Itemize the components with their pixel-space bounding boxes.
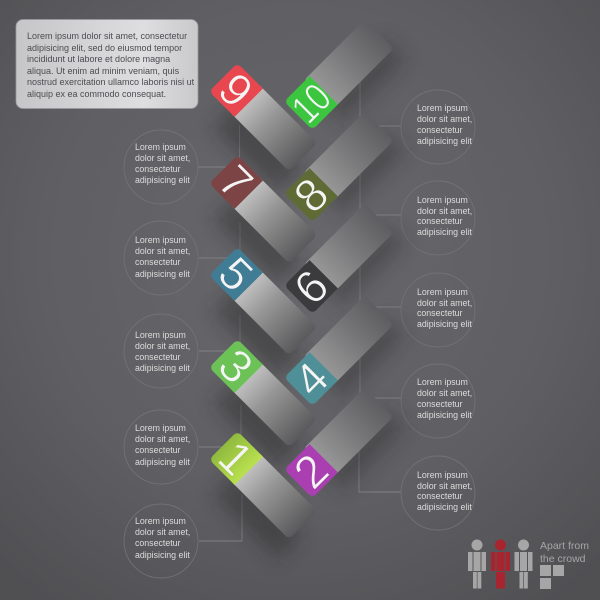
left callout 2: Lorem ipsum bbox=[135, 235, 186, 245]
ribbon step 1: 1 bbox=[209, 431, 263, 485]
intro text box bbox=[16, 20, 198, 108]
right callout 4: dolor sit amet, bbox=[417, 388, 472, 398]
ribbon step 7 bbox=[194, 151, 327, 284]
right callout 2: dolor sit amet, bbox=[417, 206, 472, 216]
left callout 3 bbox=[124, 314, 198, 388]
right callout 2: adipisicing elit bbox=[417, 227, 472, 237]
right callout 5: dolor sit amet, bbox=[417, 481, 472, 491]
right callout 1 bbox=[401, 90, 475, 164]
right callout 1: adipisicing elit bbox=[417, 136, 472, 146]
right callout 3: adipisicing elit bbox=[417, 319, 472, 329]
intro text box: nostrud exercitation ullamco laboris nisi ut bbox=[27, 77, 195, 87]
ribbon step 3: 3 bbox=[209, 339, 263, 393]
right callout 1: dolor sit amet, bbox=[417, 114, 472, 124]
right callout 5: Lorem ipsum bbox=[417, 470, 468, 480]
left callout 2: consectetur bbox=[135, 257, 181, 267]
left callout 4: adipisicing elit bbox=[135, 457, 190, 467]
left callout 2: adipisicing elit bbox=[135, 269, 190, 279]
icon: three people, one red bbox=[468, 540, 532, 588]
ribbon step 2: 2 bbox=[284, 444, 338, 498]
right callout 4: adipisicing elit bbox=[417, 410, 472, 420]
ribbon step 9: 9 bbox=[209, 63, 263, 117]
ribbon step 7: 7 bbox=[209, 155, 263, 209]
ribbon step 4 bbox=[280, 291, 406, 417]
left callout 5: adipisicing elit bbox=[135, 550, 190, 560]
right callout 3 bbox=[401, 273, 475, 347]
intro text box: aliquip ex ea commodo consequat. bbox=[27, 89, 166, 99]
left callout 3: consectetur bbox=[135, 352, 181, 362]
right callout 1: Lorem ipsum bbox=[417, 103, 468, 113]
left callout 1 bbox=[124, 130, 198, 204]
right callout 2: consectetur bbox=[417, 216, 463, 226]
left callout 4: Lorem ipsum bbox=[135, 423, 186, 433]
ribbon step 10: 10 bbox=[283, 75, 340, 132]
left callout 2 bbox=[124, 221, 198, 295]
right callout 3: dolor sit amet, bbox=[417, 298, 472, 308]
right callout 5: consectetur bbox=[417, 491, 463, 501]
ribbon step 2 bbox=[280, 383, 406, 509]
intro text box: Lorem ipsum dolor sit amet, consectetur bbox=[27, 31, 187, 41]
tagline: Apart from bbox=[540, 540, 589, 552]
left callout 5: dolor sit amet, bbox=[135, 527, 190, 537]
ribbon step 3 bbox=[194, 335, 327, 468]
intro text box: incididunt ut labore et dolore magna bbox=[27, 54, 170, 64]
ribbon step 8 bbox=[280, 107, 406, 233]
left callout 5: Lorem ipsum bbox=[135, 516, 186, 526]
ribbon step 5: 5 bbox=[209, 247, 263, 301]
left callout 1: Lorem ipsum bbox=[135, 142, 186, 152]
right callout 2: Lorem ipsum bbox=[417, 195, 468, 205]
ribbon step 8: 8 bbox=[284, 168, 338, 222]
left callout 3: dolor sit amet, bbox=[135, 341, 190, 351]
right callout 4 bbox=[401, 364, 475, 438]
left callout 1: adipisicing elit bbox=[135, 175, 190, 185]
intro text box: aliqua. Ut enim ad minim veniam, quis bbox=[27, 66, 180, 76]
ribbon step 6 bbox=[280, 199, 406, 325]
left callout 5 bbox=[124, 504, 198, 578]
right callout 3: consectetur bbox=[417, 308, 463, 318]
left callout 4: consectetur bbox=[135, 445, 181, 455]
left callout 4: dolor sit amet, bbox=[135, 434, 190, 444]
ribbon step 10 bbox=[282, 18, 406, 141]
right callout 5 bbox=[401, 456, 475, 530]
ribbon step 5 bbox=[194, 243, 327, 376]
left callout 4 bbox=[124, 410, 198, 484]
right callout 4: consectetur bbox=[417, 399, 463, 409]
ribbon step 6: 6 bbox=[284, 260, 338, 314]
tagline bbox=[540, 540, 589, 565]
connector lines bbox=[198, 80, 401, 541]
tagline: the crowd bbox=[540, 553, 586, 565]
icon: squares bbox=[540, 565, 564, 589]
right callout 2 bbox=[401, 181, 475, 255]
left callout 1: consectetur bbox=[135, 164, 181, 174]
left callout 3: Lorem ipsum bbox=[135, 330, 186, 340]
right callout 5: adipisicing elit bbox=[417, 502, 472, 512]
left callout 2: dolor sit amet, bbox=[135, 246, 190, 256]
right callout 1: consectetur bbox=[417, 125, 463, 135]
right callout 3: Lorem ipsum bbox=[417, 287, 468, 297]
ribbon step 4: 4 bbox=[284, 352, 338, 406]
left callout 3: adipisicing elit bbox=[135, 363, 190, 373]
right callout 4: Lorem ipsum bbox=[417, 377, 468, 387]
left callout 5: consectetur bbox=[135, 538, 181, 548]
ribbon step 9 bbox=[194, 59, 327, 192]
left callout 1: dolor sit amet, bbox=[135, 153, 190, 163]
intro text box: adipisicing elit, sed do eiusmod tempor bbox=[27, 43, 182, 53]
ribbon step 1 bbox=[194, 427, 327, 560]
